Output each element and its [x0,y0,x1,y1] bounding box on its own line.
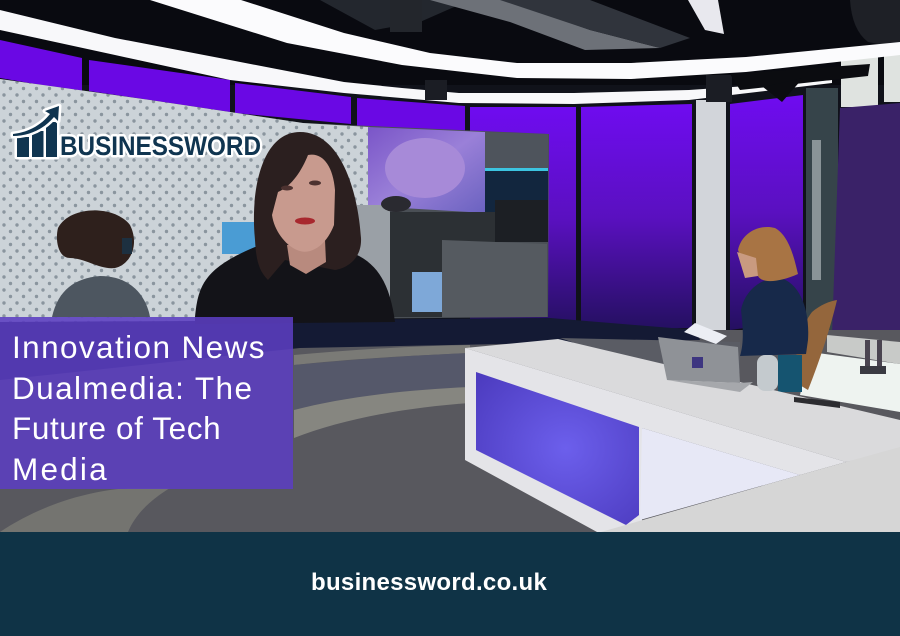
footer bar with site address [0,532,900,636]
headline panel: Media [12,450,109,486]
person on screen [195,132,395,324]
headline panel: Dualmedia: The [12,370,253,406]
headline panel: Future of Tech [12,410,221,446]
logo: Businessword: BUSINESSWORD [60,131,261,161]
ceiling light bands [0,0,900,104]
headline panel [0,317,293,489]
video wall screen [0,79,549,322]
back wall purple panels [0,40,900,342]
footer bar with site address: businessword.co.uk [311,569,547,596]
presenter at desk [684,227,837,392]
logo: Businessword [13,106,261,161]
person on screen, background left [52,210,150,317]
desk items: laptop, glass, phone, stand [658,337,886,408]
floor [0,318,900,532]
headline panel: Innovation News [12,329,266,365]
presenter desk [465,339,900,532]
studio ceiling [0,0,900,110]
